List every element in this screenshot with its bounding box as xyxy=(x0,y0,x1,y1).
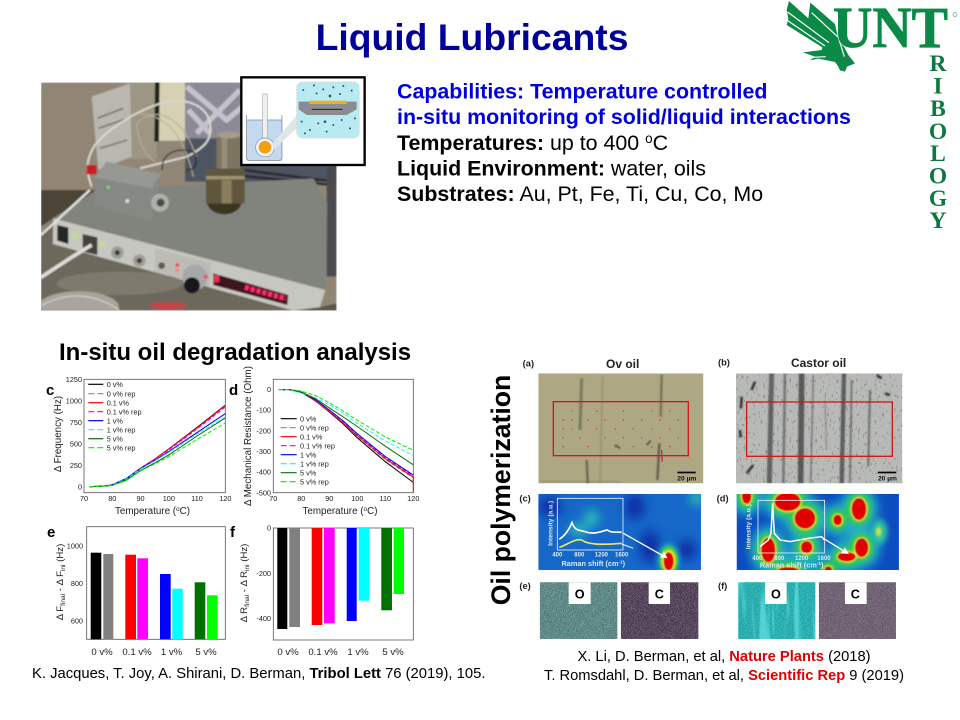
chart d: mechanical resistance vs temperature: 0 xyxy=(267,385,271,394)
chart d: mechanical resistance vs temperature: 100 xyxy=(351,494,363,503)
bar chart f: Δ R xyxy=(239,607,250,622)
panel c: ov oil Raman map xyxy=(519,492,704,575)
paper xyxy=(92,83,132,170)
device front panel xyxy=(53,218,325,311)
bar chart e: 1 v% xyxy=(161,647,183,658)
legend d: 5 v% xyxy=(300,468,317,477)
bar chart f: final xyxy=(244,594,251,607)
capabilities text block xyxy=(397,80,851,206)
chart c: frequency vs temperature: 110 xyxy=(191,494,203,503)
panel d: castor oil Raman map: -1 xyxy=(817,561,821,566)
panel d: castor oil Raman map: ) xyxy=(821,560,824,569)
chart c: frequency vs temperature: c xyxy=(46,382,54,399)
capabilities text block: o xyxy=(645,131,653,146)
bar chart e: 600 xyxy=(71,616,83,626)
panel f: EDS maps xyxy=(718,581,896,639)
bar chart e: ini xyxy=(60,564,67,571)
panel d: castor oil Raman map: 1200 xyxy=(795,556,809,562)
vertical word Tribology: L xyxy=(930,141,946,167)
citations right: X. Li, D. Berman, et al, Nature Plants (2018) xyxy=(577,649,871,665)
bar chart e: - Δ F xyxy=(55,571,66,594)
legend d: 0.1 v% xyxy=(300,432,323,441)
panel b: castor oil micrograph: 20 µm xyxy=(878,476,897,483)
legend d: 1 v% rep xyxy=(300,459,329,468)
vertical word Tribology: Y xyxy=(930,208,947,234)
vertical word Tribology xyxy=(929,51,948,234)
switch and port xyxy=(57,225,68,244)
panel d: castor oil Raman map: Intensity (a.u.) xyxy=(746,504,753,549)
map: carbon: C xyxy=(655,587,664,601)
capabilities text block: C xyxy=(653,131,668,155)
panel d: castor oil Raman map: 800 xyxy=(774,556,785,562)
capabilities text block: Liquid Environment: water, oils xyxy=(397,156,706,180)
panel f: EDS maps: (f) xyxy=(718,581,727,591)
heading: in-situ oil degradation analysis: In-situ oil degradation analysis xyxy=(59,339,411,366)
panel d: castor oil Raman map: Raman shift (cm xyxy=(760,560,817,569)
legend c xyxy=(88,380,142,452)
panel c: ov oil Raman map: 1200 xyxy=(595,553,609,559)
legend d xyxy=(281,414,335,486)
bar chart f: 0 v% xyxy=(277,647,299,658)
capabilities text block: in-situ monitoring of solid/liquid interactions xyxy=(397,105,851,129)
panel c: ov oil Raman map: (c) xyxy=(519,494,531,504)
legend c: 1 v% rep xyxy=(107,425,135,434)
panel d: castor oil Raman map: (d) xyxy=(717,494,729,504)
vertical word Tribology: O xyxy=(929,164,947,190)
panel e: EDS maps: (e) xyxy=(519,581,531,591)
figure: oil polymerization microscopy panels xyxy=(519,356,902,639)
bar chart f: -400 xyxy=(256,614,271,623)
panel c: ov oil Raman map: 400 xyxy=(552,553,563,559)
bar chart e: e xyxy=(47,524,55,541)
panel b: castor oil micrograph xyxy=(718,356,902,483)
chart c: frequency vs temperature: Δ Frequency (Hz) xyxy=(53,396,64,472)
vertical word Tribology: G xyxy=(929,186,947,212)
chart d: mechanical resistance vs temperature: C) xyxy=(367,506,377,517)
vertical word Tribology: O xyxy=(929,119,947,145)
cables xyxy=(41,190,90,235)
capabilities text block: Temperatures: up to 400 xyxy=(397,131,639,155)
UNT Tribology logo xyxy=(787,0,957,234)
chart d: mechanical resistance vs temperature: Δ Mechanical Resistance (Ohm) xyxy=(243,366,254,506)
vertical word Tribology: I xyxy=(933,74,943,100)
chart d: mechanical resistance vs temperature: -400 xyxy=(256,468,271,477)
legend c: 0 v% rep xyxy=(107,389,135,398)
panel d: castor oil Raman map xyxy=(717,494,899,570)
chart c: frequency vs temperature xyxy=(46,375,231,517)
legend d: 0 v% rep xyxy=(300,423,329,432)
panel d: castor oil Raman map: 400 xyxy=(752,556,763,562)
bar chart e xyxy=(47,524,225,658)
panel a: ov oil micrograph: Ov oil xyxy=(606,357,639,371)
map: oxygen xyxy=(738,582,815,639)
chart c: frequency vs temperature: 0 xyxy=(78,482,82,492)
chart d: mechanical resistance vs temperature: -100 xyxy=(256,406,271,415)
legend c: 1 v% xyxy=(107,416,123,425)
inset diagram: liquid cell xyxy=(241,77,365,165)
chart c: frequency vs temperature: 1250 xyxy=(66,375,82,384)
map: oxygen: O xyxy=(771,587,781,601)
bar chart f: - Δ R xyxy=(239,571,250,595)
panel a: ov oil micrograph: (a) xyxy=(523,359,534,369)
bar chart f: 0 xyxy=(267,524,271,532)
chart d: mechanical resistance vs temperature: o xyxy=(364,506,368,513)
legend c: 0 v% xyxy=(107,380,123,389)
bar chart e: (Hz) xyxy=(55,544,66,564)
chart d: mechanical resistance vs temperature: 90 xyxy=(325,494,333,503)
panel b: castor oil micrograph: (b) xyxy=(718,358,730,368)
bar chart e: 0 v% xyxy=(91,647,113,658)
bar chart f: (Hz) xyxy=(239,544,250,564)
legend c: 0.1 v% rep xyxy=(107,407,142,416)
chart d: mechanical resistance vs temperature: 70 xyxy=(269,494,277,503)
left dark wall xyxy=(41,190,97,227)
citation left: K. Jacques, T. Joy, A. Shirani, D. Berman, Tribol Lett 76 (2019), 105. xyxy=(32,666,485,682)
chart d: mechanical resistance vs temperature: -200 xyxy=(256,426,271,435)
panel c: ov oil Raman map: Intensity (a.u.) xyxy=(547,501,554,546)
bar chart f: ini xyxy=(244,564,251,571)
chart c: frequency vs temperature: Temperature ( xyxy=(115,506,176,517)
bar chart e: 800 xyxy=(71,579,83,588)
sensor box xyxy=(94,178,160,192)
icon: registered mark xyxy=(953,12,957,16)
map: carbon xyxy=(621,582,698,639)
citations right xyxy=(544,649,904,684)
panel a: ov oil micrograph xyxy=(523,357,703,483)
bar chart e: 0.1 v% xyxy=(122,647,152,658)
bar chart f: 5 v% xyxy=(382,647,404,658)
chart c: frequency vs temperature: o xyxy=(176,506,180,513)
bar chart e: Δ F xyxy=(55,606,66,620)
bar chart f: f xyxy=(230,524,236,541)
legend d: 5 v% rep xyxy=(300,477,329,486)
chart d: mechanical resistance vs temperature: Temperature ( xyxy=(303,506,364,517)
bar chart e: final xyxy=(60,593,67,606)
panel b: castor oil micrograph: Castor oil xyxy=(791,356,846,370)
digital display xyxy=(213,273,288,305)
chart d: mechanical resistance vs temperature xyxy=(229,366,419,517)
panel c: ov oil Raman map: Raman shift (cm xyxy=(562,559,619,568)
panel a: ov oil micrograph: 20 µm xyxy=(677,476,696,483)
map: oxygen: O xyxy=(575,587,585,601)
map: carbon: C xyxy=(851,587,860,601)
bar chart f: 0.1 v% xyxy=(308,647,338,658)
legend c: 5 v% xyxy=(107,434,123,443)
chart c: frequency vs temperature: 70 xyxy=(80,494,88,503)
legend c: 0.1 v% xyxy=(107,398,130,407)
capabilities text block: Substrates: Au, Pt, Fe, Ti, Cu, Co, Mo xyxy=(397,182,763,206)
legend d: 0 v% xyxy=(300,414,317,423)
legend d: 0.1 v% rep xyxy=(300,441,335,450)
bar chart f: -200 xyxy=(256,569,271,578)
panel e: EDS maps xyxy=(519,581,698,639)
capabilities text block: Capabilities: Temperature controlled xyxy=(397,80,767,104)
chart c: frequency vs temperature: 100 xyxy=(163,494,175,503)
photo: instrument xyxy=(38,82,337,323)
vertical heading: oil polymerization: Oil polymerization xyxy=(486,375,516,605)
chart c: frequency vs temperature: 1000 xyxy=(66,396,82,406)
chart c: frequency vs temperature: 750 xyxy=(70,418,82,427)
chart d: mechanical resistance vs temperature: d xyxy=(229,382,238,399)
chart c: frequency vs temperature: 250 xyxy=(70,461,82,470)
chart c: frequency vs temperature: 80 xyxy=(108,494,116,503)
panel connectors xyxy=(111,246,124,259)
legend d: 1 v% xyxy=(300,450,317,459)
chart d: mechanical resistance vs temperature: 80 xyxy=(297,494,305,503)
bar chart e: 5 v% xyxy=(195,647,217,658)
legend c: 5 v% rep xyxy=(107,443,135,452)
chart d: mechanical resistance vs temperature: 120 xyxy=(407,494,419,503)
citations right: T. Romsdahl, D. Berman, et al, Scientific Rep 9 (2019) xyxy=(544,668,904,684)
map: oxygen xyxy=(540,582,617,639)
panel c: ov oil Raman map: ) xyxy=(623,559,626,568)
bar chart e: 1000 xyxy=(67,542,83,550)
vertical word Tribology: R xyxy=(930,51,948,77)
map: carbon xyxy=(819,582,896,639)
chart c: frequency vs temperature: 90 xyxy=(136,494,145,503)
chart d: mechanical resistance vs temperature: -300 xyxy=(256,447,271,456)
panel c: ov oil Raman map: 1600 xyxy=(615,553,629,559)
chart d: mechanical resistance vs temperature: 110 xyxy=(379,494,391,503)
vertical word Tribology: B xyxy=(930,96,946,122)
knob xyxy=(182,265,208,290)
title: Liquid Lubricants xyxy=(316,16,628,58)
device top xyxy=(53,178,327,290)
panel c: ov oil Raman map: 800 xyxy=(574,553,585,559)
bar chart f xyxy=(230,524,413,658)
chart d: mechanical resistance vs temperature: -500 xyxy=(256,488,271,497)
bar chart f: 1 v% xyxy=(347,647,369,658)
brass probe xyxy=(217,134,241,171)
chart c: frequency vs temperature: C) xyxy=(180,506,190,517)
background patterned box xyxy=(184,82,240,140)
table xyxy=(41,220,293,311)
chart c: frequency vs temperature: 500 xyxy=(70,440,82,448)
panel c: ov oil Raman map: -1 xyxy=(619,560,623,565)
chart c: frequency vs temperature: 120 xyxy=(219,494,231,503)
icon: eagle xyxy=(787,1,855,72)
magnified view xyxy=(297,82,359,138)
beaker xyxy=(247,120,282,161)
panel d: castor oil Raman map: 1600 xyxy=(817,556,831,562)
